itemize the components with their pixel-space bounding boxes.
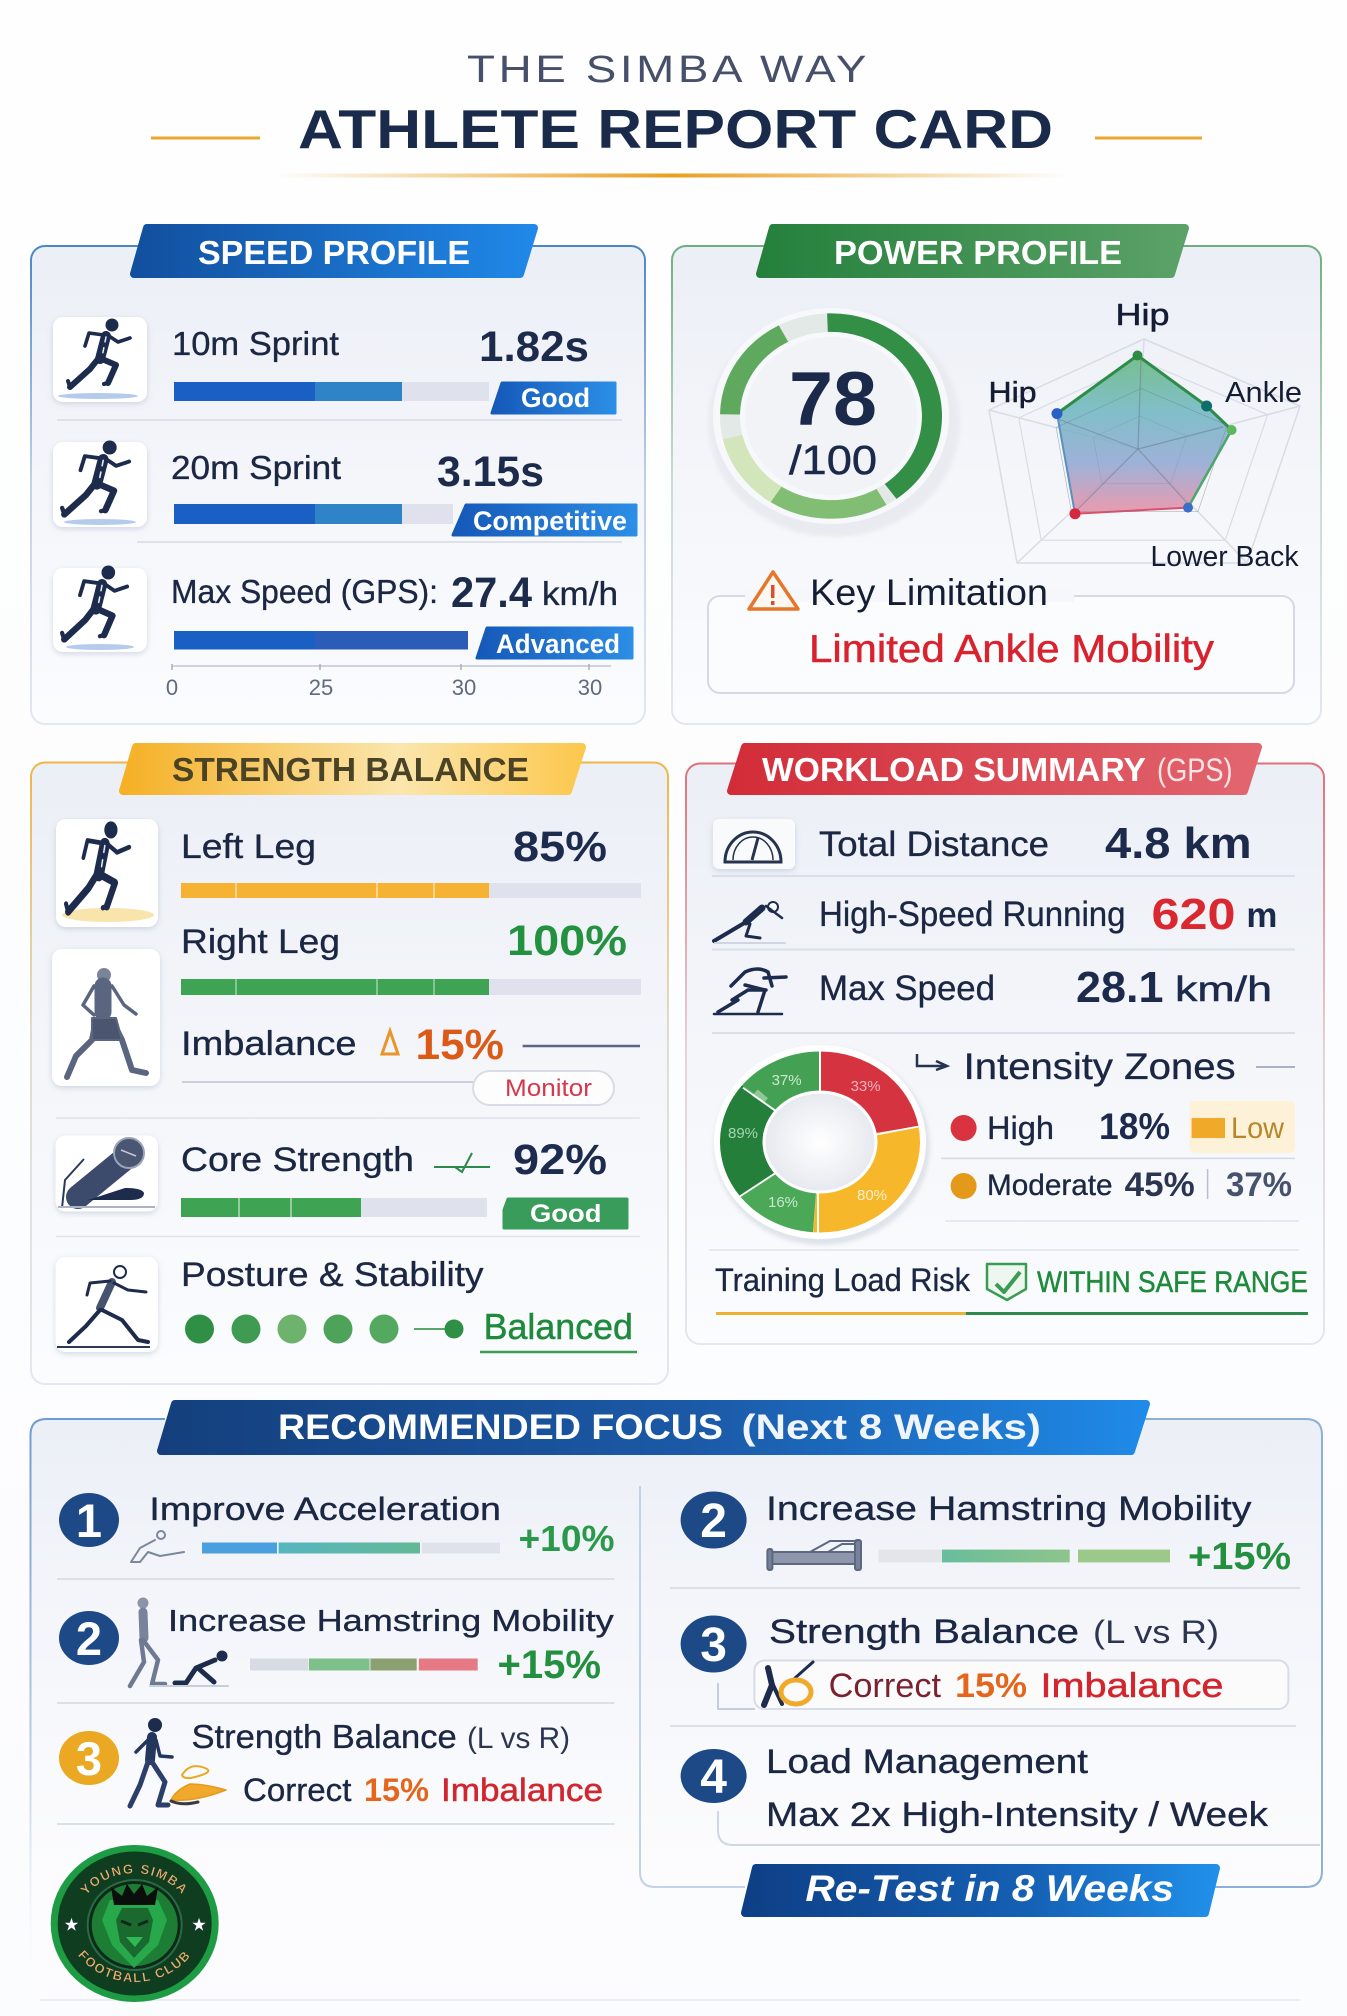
row: max speed (53, 565, 632, 659)
icon: bench machine (767, 1540, 861, 1570)
item: strength balance (right): Correct (829, 1667, 942, 1705)
axis (166, 664, 611, 700)
item: strength balance: (L vs R) (467, 1722, 570, 1755)
callout: key limitation: Key Limitation (810, 572, 1048, 613)
gauge: score 78/100 (691, 287, 971, 545)
button: re-test in 8 weeks (745, 1868, 1216, 1913)
icon: posture figure (56, 1257, 158, 1352)
item: strength balance: Correct (243, 1772, 352, 1808)
icon: runner (53, 317, 147, 402)
badge: good (504, 1199, 627, 1228)
item: strength balance (right): (L vs R) (1093, 1614, 1219, 1650)
donut chart: intensity zones: 33% (851, 1078, 881, 1095)
row: max speed (714, 963, 1272, 1014)
icon: core strength (56, 1136, 158, 1212)
icon: balance figure (130, 1718, 226, 1806)
item: strength balance (right): Strength Balance (769, 1613, 1079, 1651)
intensity zones legend: Low (1231, 1112, 1284, 1145)
donut chart: intensity zones (710, 1043, 930, 1245)
radar chart: Hip (988, 377, 1036, 409)
icon: number 4 (681, 1749, 747, 1804)
heading: speed profile (134, 228, 534, 274)
icon: number 2 (59, 1611, 119, 1665)
heading: workload summary (731, 747, 1258, 791)
heading: power profile (760, 228, 1185, 274)
item: strength balance: Strength Balance (192, 1718, 457, 1755)
item: strength balance (right) (681, 1613, 1288, 1709)
radar chart (988, 297, 1302, 573)
row: core strength (181, 1136, 627, 1228)
radar chart: Hip (1116, 297, 1170, 332)
icon: runner (53, 565, 147, 652)
icon: balance figure (764, 1662, 813, 1705)
icon: number 3: 3 (76, 1732, 102, 1785)
panel: speed profile (31, 228, 645, 724)
row: posture and stability (181, 1256, 637, 1352)
intensity zones legend: Moderate (987, 1169, 1113, 1202)
icon: right leg figure (52, 949, 160, 1086)
row: high-speed running: m (1246, 896, 1277, 935)
item: strength balance (59, 1718, 603, 1808)
item: load management: Load Management (766, 1743, 1089, 1781)
heading: workload summary: (GPS) (1157, 752, 1233, 788)
training load risk (715, 1262, 1308, 1315)
row: max speed: 28.1 (1076, 963, 1164, 1012)
intensity zones legend: 37% (1226, 1166, 1292, 1204)
intensity zones legend (917, 1046, 1299, 1221)
icon: speedometer (713, 819, 795, 869)
logo: young simba football club: YOUNG SIMBA (80, 1864, 186, 1894)
item: increase hamstring mobility (right): Increase Hamstring Mobility (766, 1490, 1251, 1528)
item: increase hamstring mobility: +15% (498, 1643, 601, 1687)
row: max speed: 27.4 (451, 569, 532, 617)
header (151, 49, 1202, 178)
item: improve acceleration (59, 1491, 614, 1562)
icon: arrow (917, 1054, 947, 1070)
item: strength balance (right): 15% (955, 1667, 1027, 1705)
panel: workload summary (686, 747, 1324, 1344)
icon: number 3 (59, 1731, 119, 1785)
badge: competitive: Competitive (473, 506, 627, 536)
row: 20m sprint (53, 440, 636, 536)
donut chart: intensity zones: 89% (728, 1125, 758, 1142)
badge: good: Good (530, 1200, 602, 1228)
row: right leg: 100% (507, 917, 627, 965)
row: posture and stability: Balanced (484, 1306, 633, 1347)
icon: check mark (434, 1153, 490, 1172)
row: high-speed running (714, 890, 1277, 943)
badge: monitor (473, 1071, 614, 1105)
radar chart: Ankle (1225, 377, 1302, 409)
panel: recommended focus (30, 1400, 1323, 2002)
item: strength balance: Imbalance (441, 1772, 603, 1808)
row: max speed: Max Speed (GPS): (171, 573, 438, 610)
heading: recommended focus (161, 1404, 1146, 1451)
heading: workload summary: WORKLOAD SUMMARY (762, 751, 1146, 788)
heading: power profile: POWER PROFILE (834, 234, 1122, 271)
logo: young simba football club: FOOTBALL CLUB (78, 1950, 190, 1982)
panel: strength balance (31, 747, 668, 1384)
axis: 0 (166, 675, 178, 700)
gauge: score 78/100: /100 (789, 437, 877, 483)
heading: strength balance (123, 747, 582, 791)
item: increase hamstring mobility: Increase Hamstring Mobility (168, 1603, 614, 1638)
row: right leg: Right Leg (181, 923, 340, 961)
row: left leg: 85% (513, 823, 607, 871)
logo: young simba football club (50, 1845, 219, 2002)
donut chart: intensity zones: 80% (857, 1187, 887, 1204)
supertitle: THE SIMBA WAY (467, 49, 870, 91)
row: max speed: km/h (542, 575, 618, 612)
callout: key limitation: Limited Ankle Mobility (809, 628, 1215, 671)
row: 10m sprint: 1.82s (479, 323, 589, 371)
donut chart: intensity zones: 16% (768, 1194, 798, 1211)
row: core strength: Core Strength (181, 1141, 414, 1179)
icon: number 3: 3 (700, 1619, 727, 1672)
panel: power profile (672, 228, 1321, 724)
icon: number 2: 2 (700, 1495, 727, 1548)
gauge: score 78/100: 78 (789, 357, 877, 442)
row: 10m sprint (53, 317, 615, 413)
intensity zones legend: High (987, 1110, 1054, 1146)
icon: number 2: 2 (76, 1612, 102, 1665)
row: max speed: Max Speed (819, 969, 995, 1008)
item: strength balance (right): Imbalance (1040, 1667, 1224, 1705)
intensity zones legend: 18% (1099, 1106, 1170, 1147)
row: high-speed running: High-Speed Running (819, 895, 1126, 934)
donut chart: intensity zones: 37% (772, 1072, 802, 1089)
icon: number 2 (681, 1492, 747, 1548)
row: left leg: Left Leg (181, 828, 316, 866)
item: load management (681, 1743, 1320, 1845)
row: imbalance: Imbalance (181, 1025, 356, 1063)
icon: crawl figure (131, 1531, 184, 1562)
icon: stretching figures (130, 1598, 228, 1686)
heading: recommended focus: (Next 8 Weeks) (742, 1408, 1041, 1447)
icon: left leg runner (56, 819, 158, 927)
item: strength balance: 15% (364, 1772, 429, 1808)
row: total distance (713, 819, 1252, 869)
badge: good (492, 383, 615, 413)
heading: speed profile: SPEED PROFILE (198, 234, 470, 271)
row: 20m sprint: 20m Sprint (171, 449, 341, 486)
heading: recommended focus: RECOMMENDED FOCUS (278, 1408, 723, 1447)
item: improve acceleration: Improve Acceleration (149, 1491, 501, 1527)
icon: number 4: 4 (700, 1751, 727, 1804)
row: 20m sprint: 3.15s (437, 448, 544, 496)
callout: key limitation (708, 572, 1294, 693)
row: right leg (181, 917, 641, 995)
axis: 30 (578, 675, 602, 700)
badge: good: Good (521, 383, 590, 413)
item: increase hamstring mobility (59, 1598, 614, 1687)
icon: number 1: 1 (76, 1494, 102, 1547)
row: imbalance (181, 1021, 640, 1105)
icon: number 3 (681, 1616, 747, 1672)
row: 10m sprint: 10m Sprint (172, 325, 339, 362)
row: core strength: 92% (513, 1136, 607, 1184)
icon: number 1 (59, 1493, 119, 1547)
item: improve acceleration: +10% (518, 1518, 614, 1559)
item: increase hamstring mobility (right): +15% (1188, 1536, 1291, 1578)
row: total distance: Total Distance (819, 825, 1049, 864)
radar chart: Lower Back (1150, 541, 1299, 573)
axis: 25 (309, 675, 333, 700)
training load risk: Training Load Risk (715, 1262, 971, 1298)
intensity zones legend: 45% (1125, 1166, 1195, 1204)
logo: young simba football club: ★ (190, 1915, 208, 1936)
icon: lunge (714, 969, 786, 1014)
logo: young simba football club: ★ (63, 1915, 80, 1936)
icon: sprinter (714, 902, 785, 943)
row: max speed: km/h (1175, 970, 1272, 1009)
item: load management: Max 2x High-Intensity / Week (766, 1796, 1269, 1834)
row: posture and stability: Posture & Stability (181, 1256, 484, 1294)
row: high-speed running: 620 (1152, 890, 1236, 939)
training load risk: WITHIN SAFE RANGE (1037, 1266, 1308, 1299)
icon: warning triangle (749, 572, 798, 609)
icon: runner (53, 440, 147, 527)
icon: shield check (987, 1264, 1026, 1300)
row: left leg (181, 823, 641, 898)
item: increase hamstring mobility (right) (681, 1490, 1291, 1578)
row: total distance: 4.8 km (1105, 819, 1252, 868)
row: imbalance: 15% (416, 1021, 504, 1069)
main title: ATHLETE REPORT CARD (298, 98, 1053, 160)
badge: monitor: Monitor (505, 1075, 592, 1102)
axis: 30 (452, 675, 476, 700)
heading: strength balance: STRENGTH BALANCE (172, 751, 529, 788)
button: re-test in 8 weeks: Re-Test in 8 Weeks (805, 1868, 1174, 1909)
intensity zones legend: Intensity Zones (964, 1046, 1236, 1087)
badge: advanced: Advanced (496, 629, 620, 659)
